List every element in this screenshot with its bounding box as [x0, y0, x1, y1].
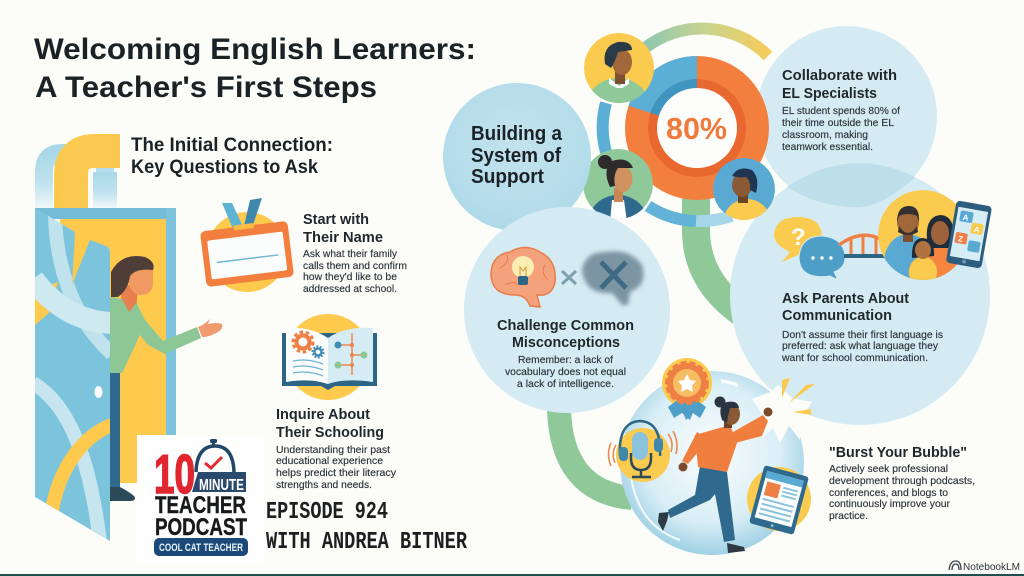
connector: lower green curve — [559, 410, 632, 498]
stopwatch icon — [196, 439, 234, 472]
text: inquire about their schooling — [276, 407, 397, 491]
text: collaborate with el specialists: teamwork essential. — [782, 141, 873, 153]
text: ask parents about communication: Communication — [782, 308, 892, 324]
text: ask parents about communication: want for school communication. — [781, 352, 928, 364]
chart: 80 percent donut — [625, 56, 769, 200]
panel: challenge common misconceptions: Challenge Common — [497, 318, 634, 334]
episode label: EPISODE 924 — [266, 499, 388, 526]
door frame — [35, 208, 176, 483]
icon: phone with translation bubbles — [946, 200, 992, 269]
icon: medal — [662, 358, 712, 420]
panel: building a system of support: System of — [471, 145, 561, 167]
text: ask parents about communication: Ask Parents About — [782, 291, 909, 307]
text: collaborate with el specialists — [782, 68, 900, 153]
icon: dots speech bubble — [799, 236, 845, 280]
logo: 10 minute teacher podcast: TEACHER — [155, 492, 246, 519]
text: inquire about their schooling: helps predict their literacy — [276, 467, 397, 479]
text: ask parents about communication: Don't assume their first language is — [782, 329, 943, 341]
watermark: notebooklm: NotebookLM — [963, 561, 1020, 573]
avatar: man with collar — [584, 33, 654, 103]
icon: brain with light bulb — [491, 248, 555, 307]
avatar: woman with bun — [584, 149, 653, 219]
panel: challenge common misconceptions: Remember: a lack of — [518, 354, 613, 366]
icon: multiply sign — [562, 271, 576, 284]
text: ask parents about communication: preferred: ask what language they — [782, 340, 939, 352]
text: burst your bubble: conferences, and blogs to — [829, 487, 948, 499]
text: start with their name: calls them and confirm — [303, 260, 407, 272]
illustration: door with welcoming teacher — [33, 208, 222, 542]
teacher figure — [110, 256, 222, 501]
text: start with their name: addressed at school. — [303, 283, 397, 295]
icon: question speech bubble: ? — [791, 224, 806, 251]
text: burst your bubble: Actively seek professional — [829, 463, 948, 475]
icon: phone with translation bubbles: A — [973, 225, 981, 235]
icon: question speech bubble — [774, 217, 822, 262]
head — [724, 418, 732, 428]
title: A Teacher's First Steps — [35, 71, 377, 104]
text: inquire about their schooling: Understanding their past — [276, 444, 390, 456]
text: collaborate with el specialists: EL Specialists — [782, 86, 877, 102]
icon: phone with translation bubbles: A — [962, 213, 970, 223]
icon: family group — [878, 190, 957, 280]
panel: building a system of support: Support — [471, 166, 544, 188]
heading: the initial connection: The Initial Connection: — [131, 135, 333, 156]
icon: podcast microphone — [608, 421, 677, 482]
burst star — [752, 385, 812, 443]
text: collaborate with el specialists: EL student spends 80% of — [782, 105, 900, 117]
panel: collaborate circle — [756, 26, 937, 207]
icon: name badge — [200, 198, 294, 292]
panel: challenge common misconceptions: a lack of intelligence. — [517, 378, 614, 390]
panel: challenge common misconceptions: Misconceptions — [512, 335, 620, 351]
icon: yellow burst rays — [782, 378, 815, 415]
avatar: man in yellow — [713, 158, 775, 220]
icon: crossed out cloudy brain — [582, 251, 644, 305]
title: Welcoming English Learners: — [34, 33, 476, 66]
logo: 10 minute teacher podcast — [137, 435, 265, 564]
text: collaborate with el specialists: their time outside the EL — [782, 117, 894, 129]
chart: 80 percent donut: 80% — [666, 111, 727, 146]
door leaf — [33, 208, 112, 542]
text: inquire about their schooling: strengths and needs. — [276, 479, 372, 491]
text: burst your bubble: practice. — [829, 510, 868, 522]
text: collaborate with el specialists: classroom, making — [782, 129, 868, 141]
legs — [668, 466, 735, 542]
icon: open book with gears and diagram — [282, 314, 377, 400]
logo: 10 minute teacher podcast: MINUTE — [199, 477, 244, 494]
panel: ask parents circle — [730, 165, 990, 425]
text: inquire about their schooling: educational experience — [276, 455, 383, 467]
heading: the initial connection — [131, 135, 333, 178]
text: start with their name — [303, 212, 407, 295]
connector: green curve from donut — [696, 198, 745, 315]
icon: tablet with article — [747, 465, 811, 535]
logo: 10 minute teacher podcast: COOL CAT TEACHER — [159, 542, 243, 554]
text: start with their name: how they'd like to be — [303, 271, 397, 283]
bottom rule — [0, 574, 1024, 576]
arms and torso — [695, 425, 737, 472]
decorative overlap of the two circles — [787, 163, 915, 207]
text: collaborate with el specialists: Collaborate with — [782, 68, 897, 84]
panel: challenge common misconceptions — [464, 207, 670, 413]
text: burst your bubble: continuously improve your — [829, 498, 950, 510]
text: start with their name: Their Name — [303, 230, 383, 246]
illustration: pipe arches over door — [44, 151, 120, 208]
text: burst your bubble: "Burst Your Bubble" — [829, 445, 967, 461]
heading: the initial connection: Key Questions to Ask — [131, 157, 318, 178]
panel: challenge common misconceptions: vocabulary does not equal — [505, 366, 626, 378]
logo: 10 minute teacher podcast: PODCAST — [155, 514, 247, 541]
episode label — [266, 499, 467, 556]
text: start with their name: Start with — [303, 212, 369, 228]
panel: building a system of support: Building a — [471, 123, 563, 145]
illustration: burst bubble — [620, 371, 812, 555]
text: ask parents about communication — [781, 291, 943, 364]
title — [34, 33, 476, 104]
logo: 10 minute teacher podcast: 10 — [154, 443, 195, 505]
icon: bridge — [839, 234, 892, 256]
panel: building a system of support — [443, 83, 591, 231]
text: inquire about their schooling: Inquire About — [276, 407, 370, 423]
text: start with their name: Ask what their family — [303, 248, 398, 260]
icon: phone with translation bubbles: Z — [957, 234, 964, 244]
figure: running woman — [658, 396, 772, 553]
text: inquire about their schooling: Their Schooling — [276, 425, 384, 441]
text: burst your bubble: development through podcasts, — [829, 475, 975, 487]
episode label: WITH ANDREA BITNER — [266, 529, 467, 556]
text: burst your bubble — [829, 445, 975, 522]
connector: outer ring arcs — [603, 29, 768, 221]
